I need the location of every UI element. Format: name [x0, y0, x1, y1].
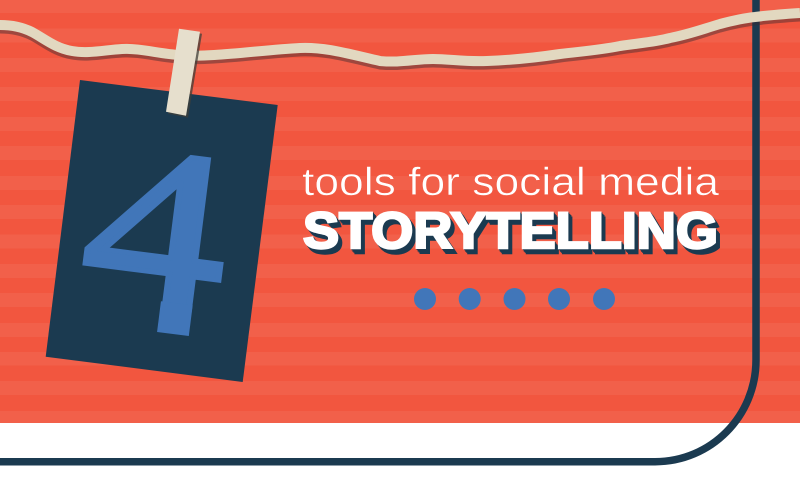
rope	[0, 13, 800, 65]
clothespin	[166, 29, 202, 118]
subtitle: tools for social media	[302, 161, 720, 204]
photo card	[46, 80, 278, 382]
dots row	[414, 288, 615, 310]
title: storytelling with shadow: STORYTELLING	[303, 202, 718, 259]
big number 4: 4	[70, 93, 244, 363]
